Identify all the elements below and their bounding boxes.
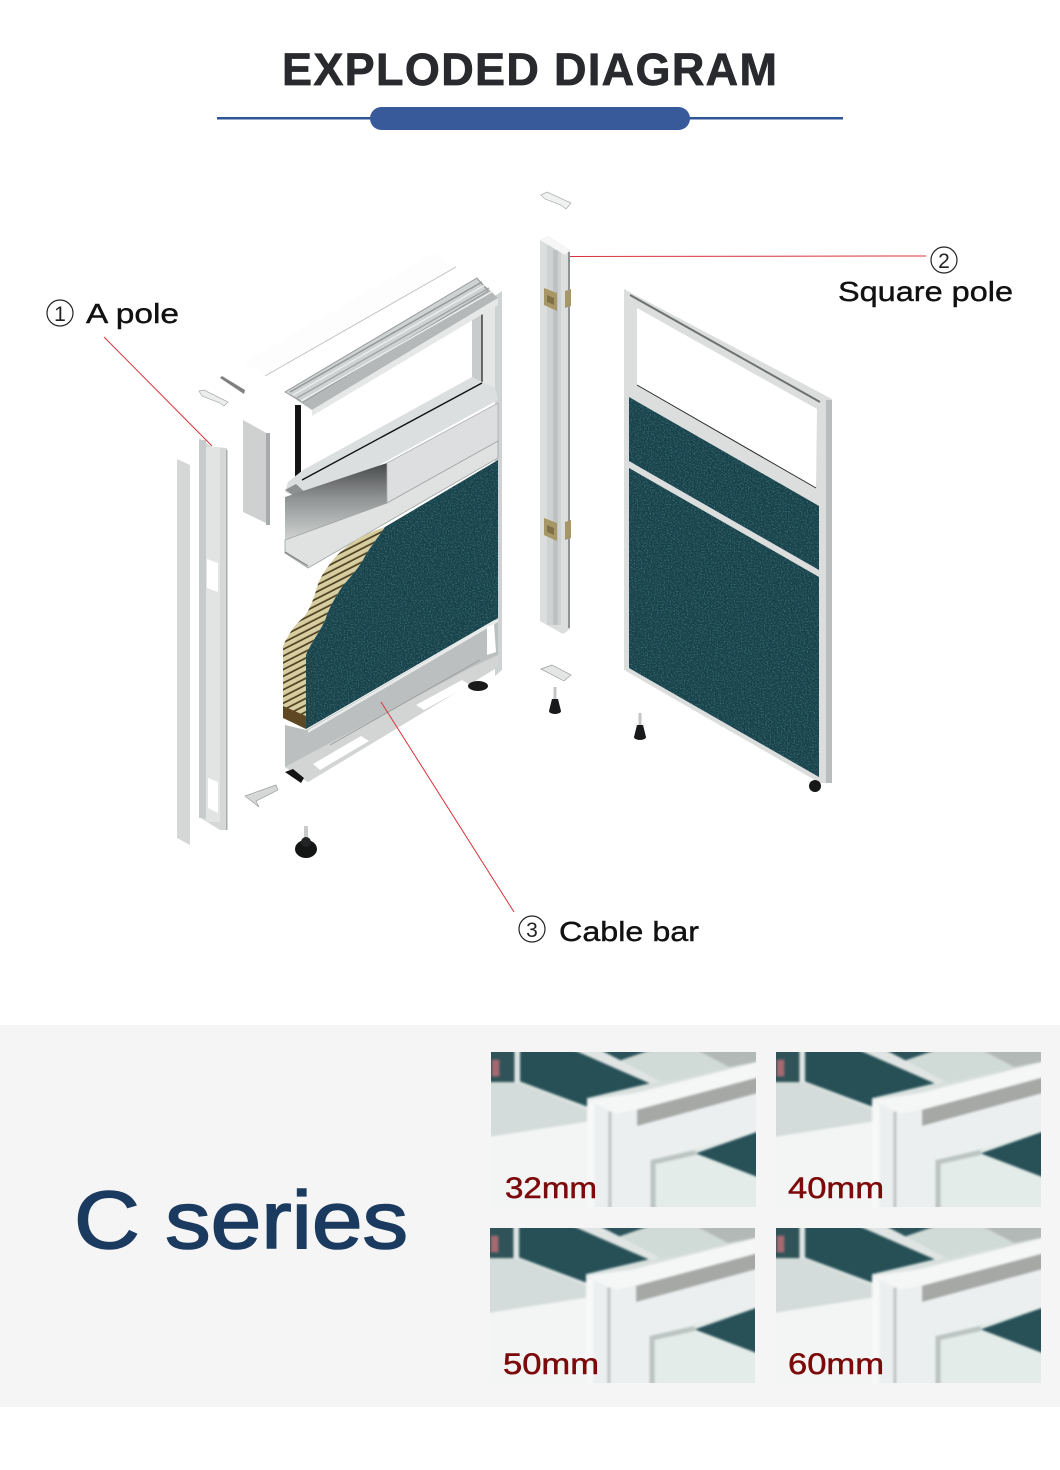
label: A pole (47, 298, 179, 329)
part: leveling foot (295, 826, 317, 858)
label: A pole: A pole (86, 298, 179, 329)
part: pole foot (549, 687, 561, 714)
tile: 50mm (479, 1216, 773, 1396)
label: Cable bar: 3 (526, 919, 538, 942)
part: bottom bracket (245, 785, 278, 807)
panel: C series (0, 1025, 1060, 1407)
part: top end cap (199, 390, 228, 406)
heading: C series: C series (74, 1175, 408, 1266)
part: side cover (243, 420, 270, 525)
part: window sill (285, 377, 498, 503)
part: bottom rail (285, 619, 498, 783)
part: fabric panel (306, 460, 498, 729)
leader line: Cable bar (381, 702, 514, 912)
tile: 60mm: 60mm (788, 1348, 884, 1381)
tile: 50mm: 50mm (503, 1348, 599, 1381)
part: assembled panel (624, 289, 832, 783)
fabric lower (629, 468, 819, 777)
leader line: Square pole (570, 255, 926, 258)
fabric upper (629, 397, 819, 570)
part: small connector (220, 376, 245, 394)
tile: 40mm: 40mm (788, 1172, 884, 1205)
part: honeycomb core (283, 527, 385, 729)
label: Cable bar: Cable bar (559, 916, 699, 947)
part: A pole (199, 438, 228, 830)
part: cable channel (285, 463, 387, 540)
title divider (217, 107, 843, 130)
part: honeycomb base (283, 706, 306, 729)
part: lower rail strip (285, 441, 498, 568)
tile: 32mm: 32mm (505, 1172, 597, 1205)
label: Square pole: Square pole (838, 276, 1013, 307)
label: Square pole: 2 (938, 250, 950, 273)
label: A pole: 1 (54, 303, 66, 326)
part: outer end strip (177, 459, 190, 845)
part: rail cover (387, 403, 498, 503)
part: top rail (285, 278, 498, 416)
part: square pole (540, 236, 570, 634)
part: pole clips (544, 288, 571, 541)
label: Cable bar (519, 916, 699, 947)
part: black rod (295, 405, 301, 493)
part: lower bracket (541, 665, 571, 681)
tile: 32mm (480, 1040, 774, 1220)
part: square pole cap (541, 192, 571, 209)
exploded panel diagram (177, 192, 832, 858)
tile: 60mm (765, 1216, 1059, 1396)
part: middle panel frame post (472, 291, 502, 676)
leader line: A pole (104, 337, 212, 446)
part: top cover strip (243, 253, 456, 376)
tile: 40mm (765, 1040, 1059, 1220)
part: panel corner foot (809, 780, 821, 792)
label: Square pole (838, 247, 1013, 307)
title: EXPLODED DIAGRAM (282, 44, 777, 95)
part: panel foot (634, 713, 646, 740)
